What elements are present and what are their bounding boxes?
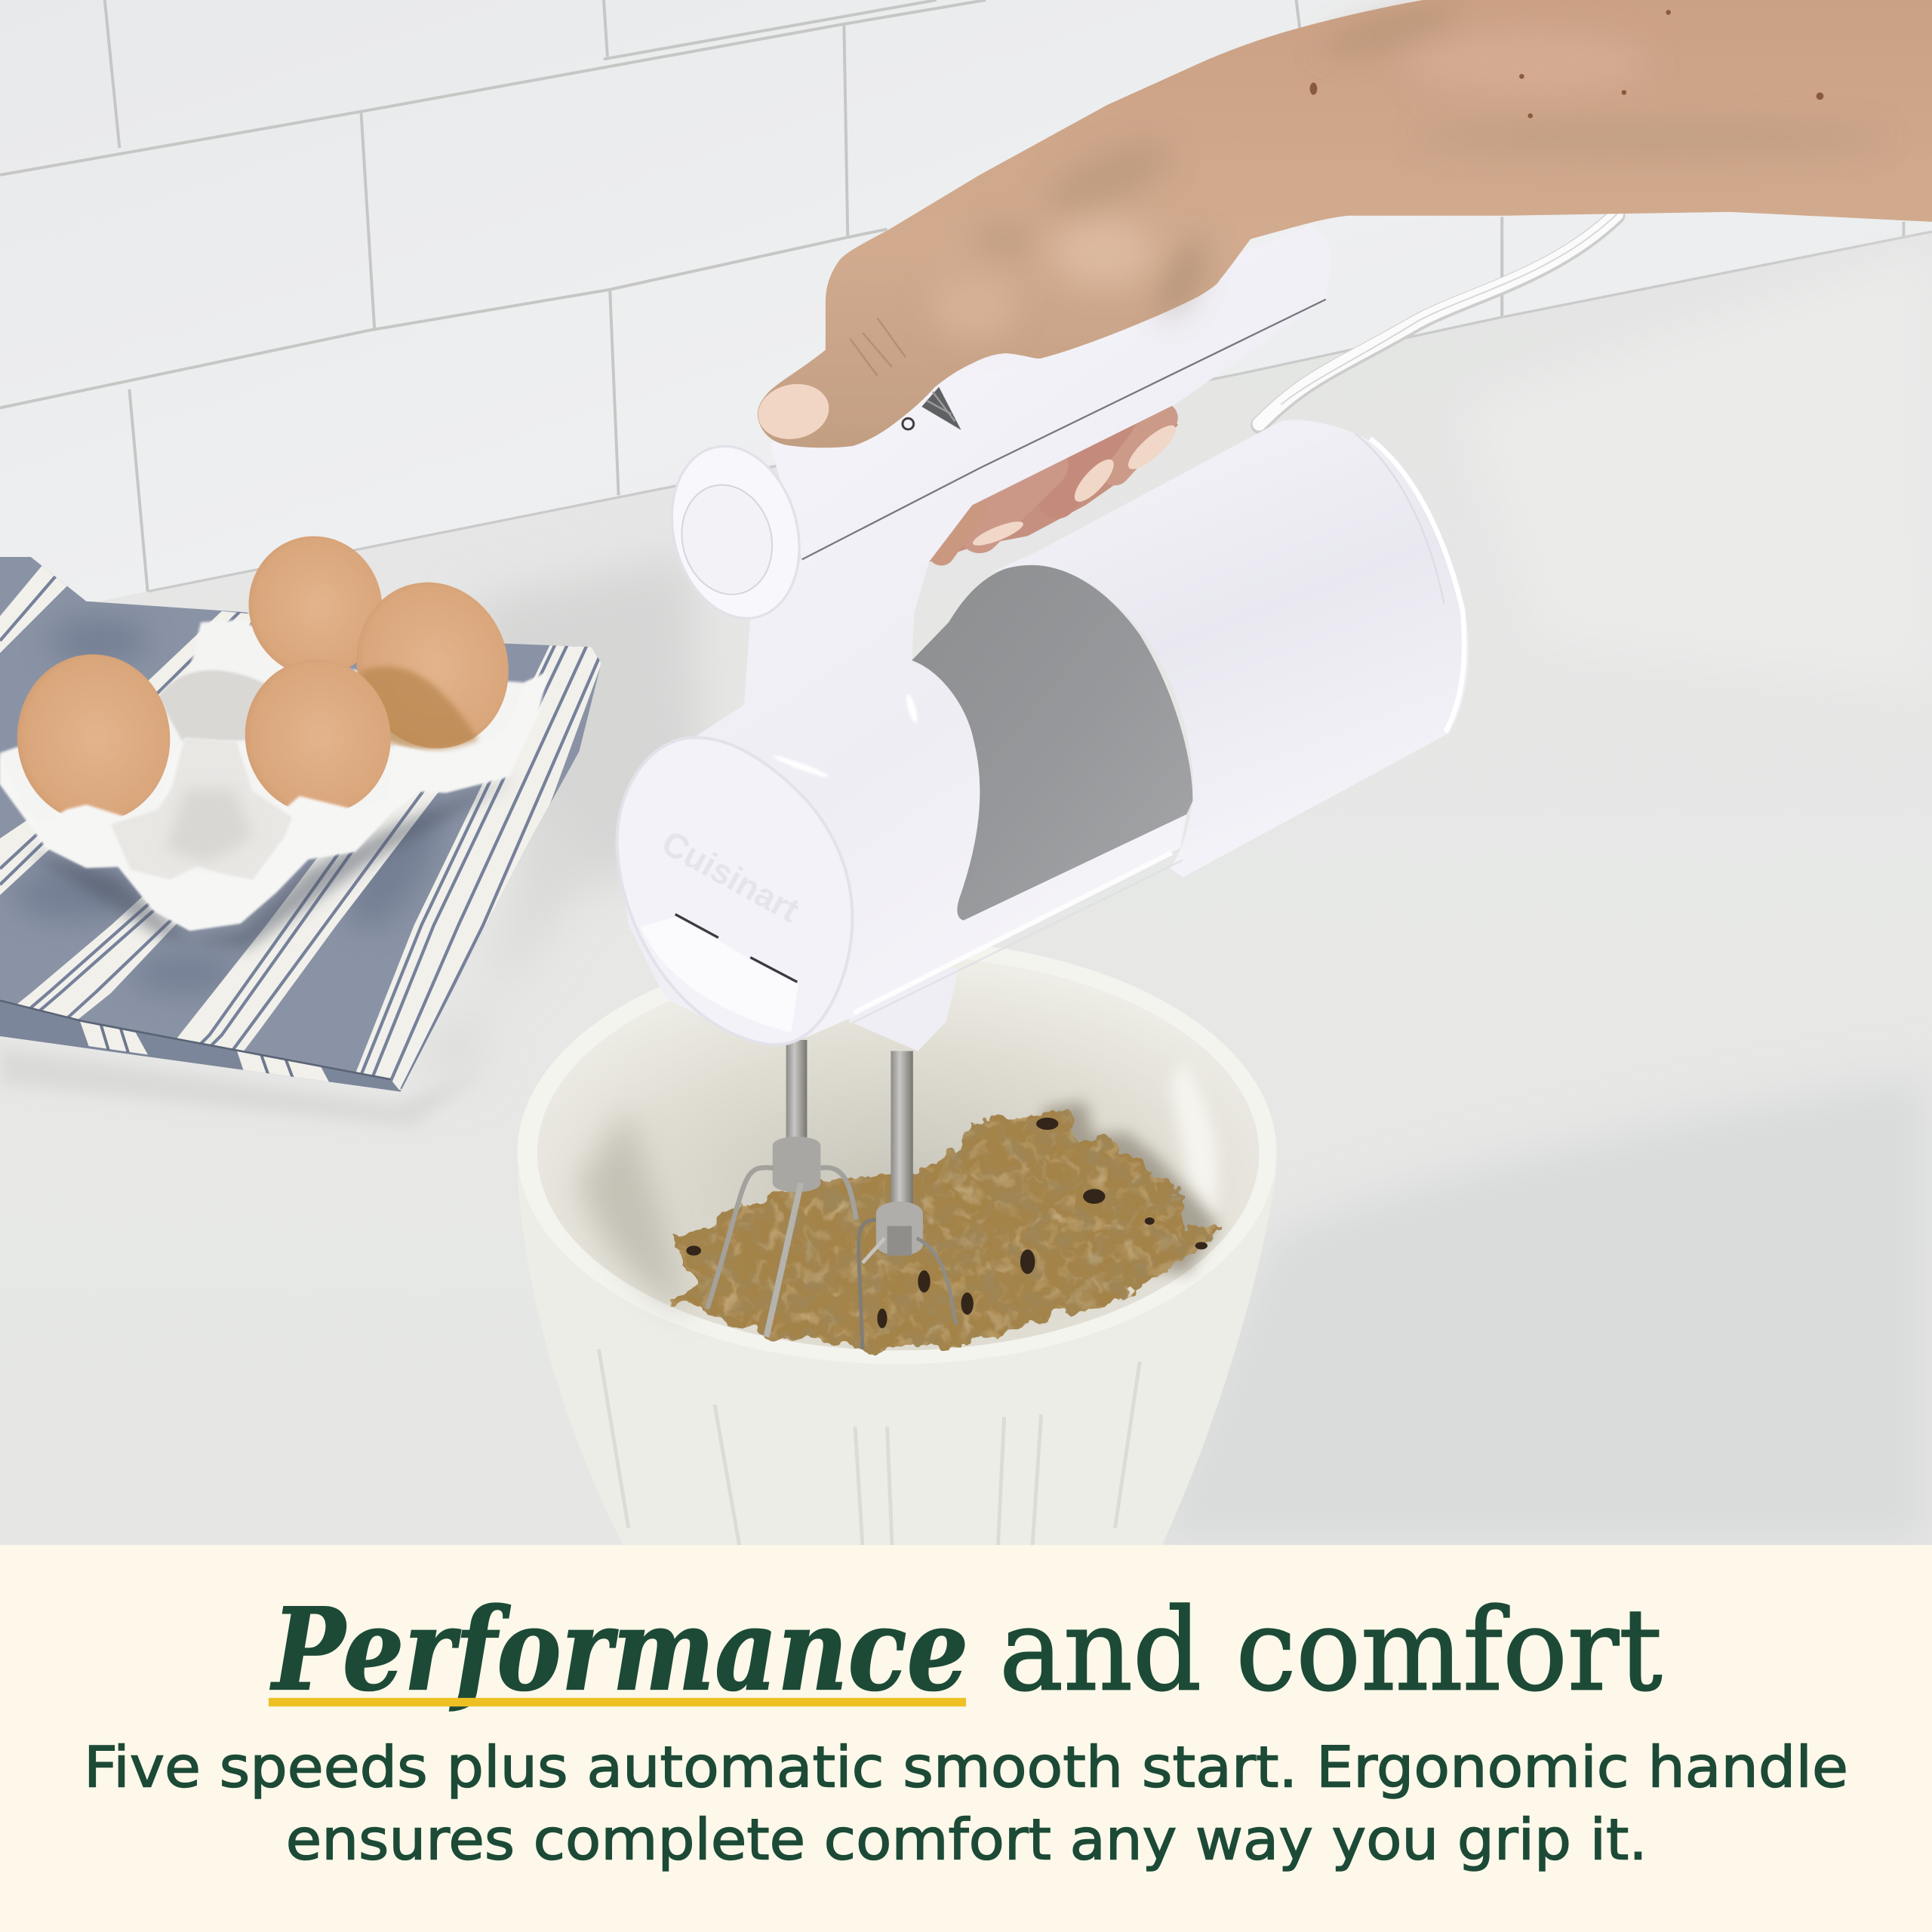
body text — [84, 1734, 1848, 1873]
bowl exterior — [518, 1171, 1276, 1545]
hand and arm — [753, 0, 1932, 448]
back cavity — [158, 669, 264, 741]
push button — [669, 475, 784, 605]
base pedestal — [849, 968, 958, 1051]
handle and body — [617, 226, 1331, 1044]
heading emphasis: Performance — [269, 1583, 968, 1716]
egg tray with four eggs — [0, 522, 547, 949]
bowl rim — [518, 940, 1276, 1364]
egg: back — [249, 536, 382, 667]
mixing bowl back — [518, 940, 1276, 1545]
tray shadow — [25, 777, 518, 949]
fingernails — [971, 420, 1182, 550]
tile wall — [0, 0, 1932, 641]
hand mixer — [617, 226, 1469, 1051]
fingers under handle — [929, 401, 1182, 561]
left beater — [707, 1040, 857, 1337]
upper flap stripes — [0, 557, 610, 1091]
heading: Performance and comfort — [269, 1583, 1662, 1716]
caption banner — [0, 1545, 1932, 1932]
lower flap — [0, 1001, 401, 1092]
cookie dough — [672, 1102, 1223, 1349]
power cord — [1260, 214, 1617, 425]
marble counter — [0, 232, 1932, 1545]
body line 1: Five speeds plus automatic smooth start. Ergonomic handle — [84, 1734, 1848, 1800]
tray front rim — [0, 672, 547, 931]
egg: right — [356, 583, 509, 752]
speed switch — [903, 387, 961, 430]
moles — [1310, 10, 1823, 118]
rear cylinder — [987, 420, 1469, 877]
body line 2: ensures complete comfort any way you grip it. — [286, 1807, 1647, 1873]
thumbnail — [753, 377, 834, 445]
front disc — [617, 737, 852, 1044]
arm — [758, 0, 1932, 448]
striped towel — [0, 542, 616, 1109]
handle seam — [802, 300, 1326, 559]
photo: kitchen scene with hand mixer — [0, 0, 1932, 1545]
grey grip — [912, 565, 1192, 921]
tray body — [0, 620, 547, 931]
glossy highlights — [772, 694, 919, 780]
front cavity — [111, 738, 292, 880]
beaters — [707, 1040, 956, 1349]
yellow underline — [269, 1698, 966, 1706]
brand embossing: Cuisinart — [656, 823, 806, 930]
counter shadows — [0, 247, 1932, 1545]
cap end — [654, 432, 818, 632]
vent slots — [675, 914, 797, 982]
right beater — [859, 1051, 956, 1349]
bowl interior — [537, 956, 1260, 1350]
egg: front centre — [245, 667, 391, 809]
heading remainder: and comfort — [999, 1585, 1662, 1716]
skin shading — [931, 0, 1885, 340]
egg: front left — [17, 654, 171, 817]
